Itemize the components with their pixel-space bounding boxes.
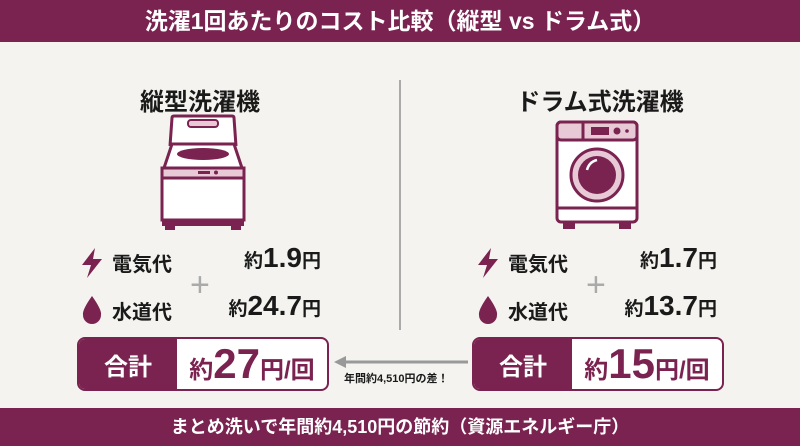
icon: lightning xyxy=(478,248,498,278)
divider xyxy=(399,80,401,330)
left: water row xyxy=(82,290,321,324)
icon: top-load washer xyxy=(160,114,246,230)
plus sign: + xyxy=(586,266,606,304)
icon: water drop xyxy=(478,296,498,324)
left: water row: 水道代 xyxy=(112,302,172,324)
right: electricity row xyxy=(478,242,717,278)
arrow with difference: 年間約4,510円の差！ xyxy=(344,373,449,385)
right: water row xyxy=(478,290,717,324)
footer bar: まとめ洗いで年間約4,510円の節約（資源エネルギー庁） xyxy=(171,417,629,437)
title bar xyxy=(0,0,800,42)
total box right: 約 円/回 xyxy=(584,357,710,384)
left: electricity row xyxy=(82,242,321,278)
total box left xyxy=(77,337,329,391)
total box left: 27 xyxy=(213,340,260,387)
heading: right: ドラム式洗濯機 xyxy=(516,89,684,116)
right: water row: 水道代 xyxy=(508,302,568,324)
title bar: 洗濯1回あたりのコスト比較（縦型 vs ドラム式） xyxy=(145,8,655,34)
left: electricity row: 約1.9円 xyxy=(244,242,321,273)
plus sign: + xyxy=(190,266,210,304)
left: water row: 約24.7円 xyxy=(228,290,321,321)
total box left: 合計 xyxy=(104,354,152,380)
right: water row: 約13.7円 xyxy=(624,290,717,321)
right: electricity row: 約1.7円 xyxy=(640,242,717,273)
icon: lightning xyxy=(82,248,102,278)
icon: water drop xyxy=(82,296,102,324)
total box right: 15 xyxy=(608,340,655,387)
footer bar xyxy=(0,408,800,446)
right: electricity row: 電気代 xyxy=(508,254,568,276)
total box right xyxy=(472,337,724,391)
total box right: 合計 xyxy=(499,354,547,380)
icon: drum washer xyxy=(556,120,638,229)
heading: left: 縦型洗濯機 xyxy=(140,89,260,116)
arrow with difference xyxy=(334,356,468,385)
left: electricity row: 電気代 xyxy=(112,254,172,276)
total box left: 約 円/回 xyxy=(189,357,315,384)
